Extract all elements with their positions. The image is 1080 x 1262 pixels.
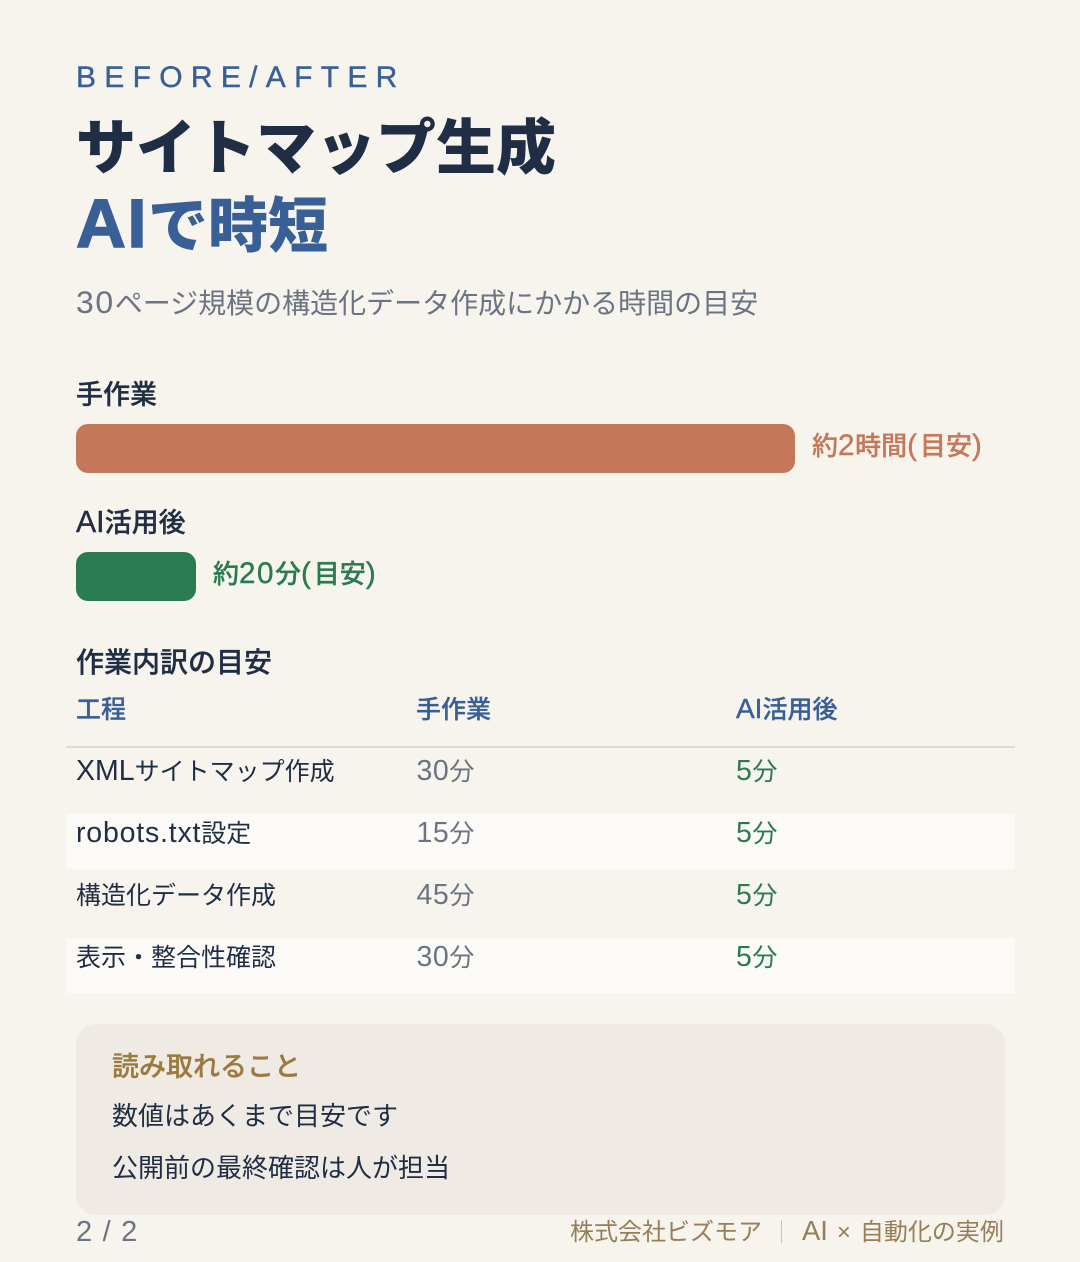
row 1: XMLサイトマップ作成 [76,755,335,787]
takeaway heading: 読み取れること [112,1045,301,1084]
subtitle: 30ページ規模の構造化データ作成にかかる時間の目安 [76,284,758,320]
bar: AI [76,552,196,601]
takeaway 1: 数値はあくまで目安です [112,1101,398,1131]
row band 4 [66,938,1015,993]
footer credit [570,1215,1004,1246]
row 1 manual: 30分 [416,755,474,787]
label: AI: AI活用後 [76,501,186,540]
bar: manual [76,424,795,473]
page number: 2 / 2 [76,1216,138,1248]
series name: AI × 自動化の実例 [802,1215,1004,1246]
row 1 AI: 5分 [736,755,777,787]
takeaway 2: 公開前の最終確認は人が担当 [112,1153,450,1183]
row 3: 構造化データ作成 [76,882,276,910]
company name: 株式会社ビズモア [570,1219,762,1246]
row 4: 表示・整合性確認 [76,944,276,972]
row 2 manual: 15分 [416,817,474,849]
takeaway panel [76,1024,1005,1215]
eyebrow: BEFORE/AFTER [76,61,406,94]
table [66,690,1015,973]
header: manual: 手作業 [416,690,491,726]
row 2 AI: 5分 [736,817,777,849]
title line 2: AIで時短 [76,178,328,265]
row 3 AI: 5分 [736,879,777,911]
label: manual: 手作業 [76,373,157,412]
value: manual: 約2時間(目安) [812,426,982,463]
title [76,100,556,265]
header: AI: AI活用後 [736,690,837,726]
separator [781,1220,782,1243]
row 4 manual: 30分 [416,941,474,973]
section heading: 作業内訳の目安 [76,641,272,681]
value: AI: 約20分(目安) [213,554,379,591]
title line 1: サイトマップ生成 [76,100,556,187]
row 4 AI: 5分 [736,941,777,973]
header: process: 工程 [76,690,126,726]
row 3 manual: 45分 [416,879,474,911]
row band 2 [66,814,1015,869]
row 2: robots.txt設定 [76,817,251,849]
